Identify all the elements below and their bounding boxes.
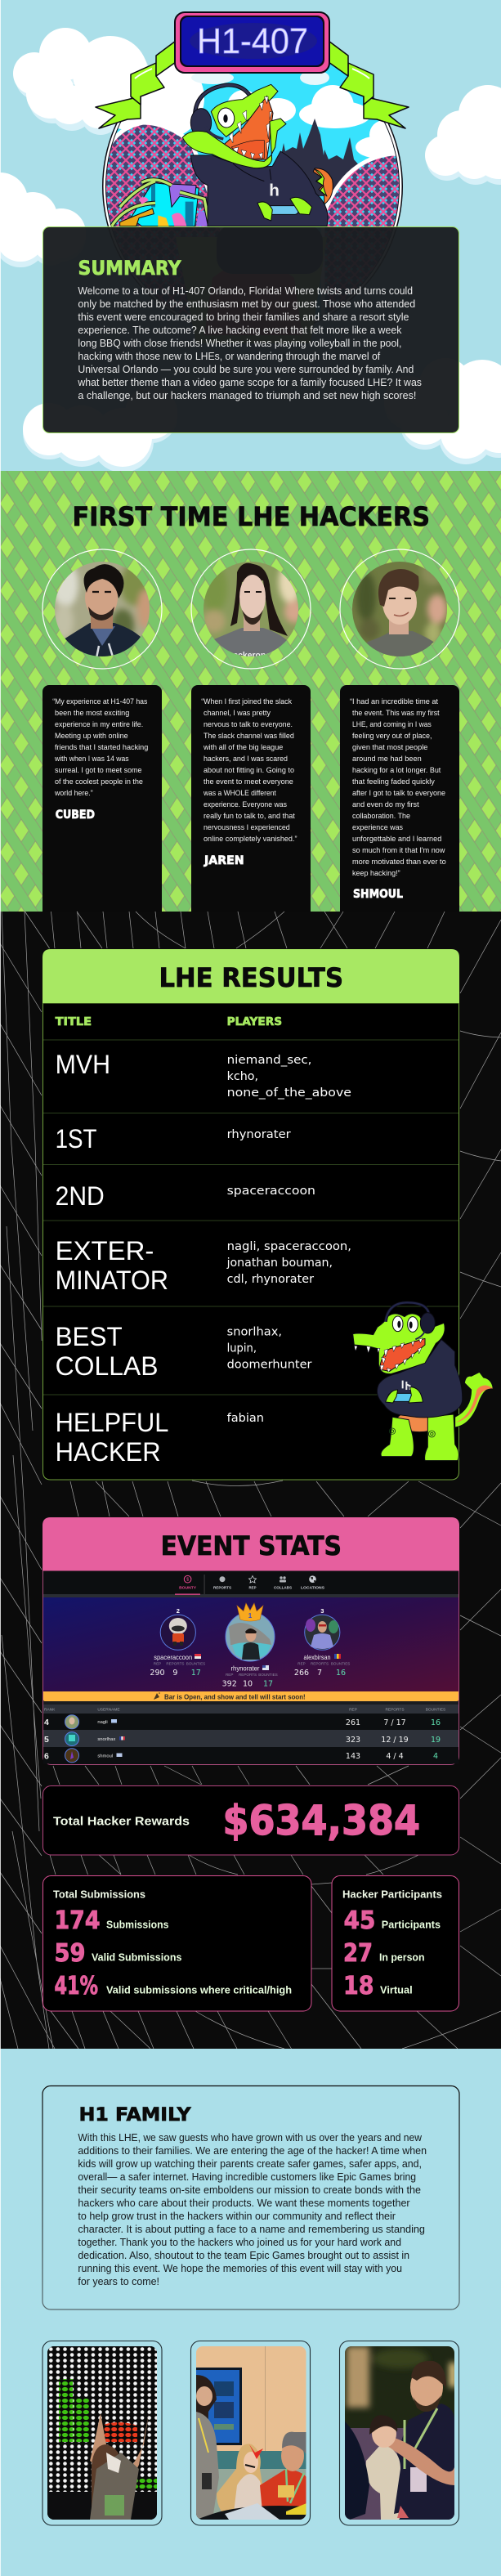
value: rewards amount: $634,384 (222, 1797, 420, 1844)
tab: reports: REPORTS (213, 1586, 232, 1591)
table row: shmoul: 4 / 4 (386, 1752, 404, 1761)
ride carriage (112, 180, 218, 226)
quote card: jaren: The slack channel was filled (204, 731, 294, 740)
quote card: jaren: hackers, and I was scared (204, 754, 288, 763)
section: family background (0, 2049, 501, 2576)
table header: REPORTS (385, 1707, 405, 1712)
podium: first place: 10 (243, 1679, 253, 1689)
text block: family body: to help grow trust in the hackers within our community and reflect their (78, 2211, 396, 2222)
announcement banner (43, 1691, 459, 1701)
headset (190, 85, 251, 137)
stat: submissions: Submissions (106, 1920, 168, 1931)
quote card: cubed: Meeting up with online (55, 731, 128, 740)
stat: virtual (343, 1972, 413, 2000)
text block: family body: for years to come! (78, 2276, 159, 2287)
stat: participants: 45 (344, 1906, 375, 1935)
text block: family body: overall— a safer internet. Having incredible customers like Epic Games bring (78, 2171, 416, 2183)
photo frame: father holding child (340, 2341, 459, 2525)
row: exterminator: nagli, spaceraccoon, (227, 1240, 351, 1253)
heading: summary: SUMMARY (78, 257, 181, 280)
quote card: shmoul: the event. This was my first (352, 708, 440, 717)
medallion ring (102, 36, 403, 337)
podium: first place: rhynorater (230, 1664, 260, 1673)
heading: LHE results: LHE RESULTS (159, 962, 343, 993)
title badge: H1-407 (175, 12, 329, 73)
column header: title: TITLE (56, 1015, 92, 1028)
ribbon: right (329, 41, 409, 128)
row: exterminator: MINATOR (56, 1266, 168, 1295)
cloud: top left (13, 28, 164, 135)
stat: in person: In person (379, 1952, 425, 1964)
quote card: shmoul: collaboration. The (352, 811, 410, 820)
quote card: jaren: nervousness I experienced (204, 822, 290, 831)
table header (43, 1701, 459, 1714)
table row: shmoul: shmoul (97, 1754, 113, 1759)
panel: summary (42, 227, 459, 433)
column header: players: PLAYERS (227, 1015, 282, 1028)
podium: third place: 16 (336, 1669, 346, 1678)
quote card: cubed: with when I was 14 was (54, 754, 129, 763)
stat: participants (344, 1906, 441, 1935)
tab: locations: LOCATIONS (301, 1586, 325, 1591)
row: MVH: none_of_the_above (227, 1086, 351, 1100)
stat: valid submissions (54, 1939, 181, 1968)
podium: first place (222, 1603, 278, 1689)
quote card: shmoul: LHE, and coming in I was (352, 719, 432, 728)
quote card: shmoul: hacking for a lot longer. But (352, 765, 441, 774)
table row: snorlhax: 5 (44, 1735, 49, 1745)
table row: shmoul: 143 (346, 1752, 360, 1761)
tab: locations (301, 1575, 325, 1591)
table row: snorlhax: 12 / 19 (381, 1736, 409, 1745)
podium panel (43, 1597, 459, 1691)
row: 1ST: rhynorater (227, 1128, 291, 1141)
row: best collab: doomerhunter (227, 1359, 312, 1372)
hoodie logo: h (269, 181, 280, 199)
stat: in person (343, 1939, 425, 1968)
table row: snorlhax: 19 (431, 1736, 441, 1745)
eyes (392, 1316, 418, 1332)
text block: summary body: this event were encouraged to bring their families and share a resort style (78, 311, 409, 323)
podium: third place: alexbirsan (304, 1654, 331, 1661)
stat: in person: 27 (343, 1939, 373, 1968)
section: sky header background (0, 0, 501, 471)
text block: summary body: experience. The outcome? A live hacking event that felt more like a week (78, 325, 402, 336)
label: total hacker rewards: Total Hacker Rewards (53, 1815, 190, 1828)
headset (386, 1302, 435, 1339)
quote card: shmoul: given that most people (352, 742, 427, 751)
tail (313, 168, 333, 204)
quote card: jaren: experience. Everyone was (204, 800, 287, 809)
quote card: jaren: “When I first joined the slack (201, 697, 292, 706)
podium: third place: 266 (294, 1669, 309, 1678)
right lattice dome (325, 152, 399, 226)
table row: shmoul (43, 1747, 459, 1764)
quote card: cubed: of the coolest people in the (55, 777, 143, 786)
stat: participants: Participants (382, 1920, 441, 1931)
quote card: shmoul: unforgettable and I learned (352, 834, 441, 843)
table row: nagli: nagli (97, 1720, 108, 1725)
row: 1ST (56, 1124, 291, 1154)
text block: family body: With this LHE, we saw guests who have grown with us over the years and new (78, 2132, 423, 2144)
row: best collab: lupin, (227, 1342, 257, 1355)
quote card: shmoul: that feeling faded quickly (352, 777, 435, 786)
text block: family body: character. It is about putting a face to a name and remembering us standing (78, 2224, 425, 2235)
legs (381, 1414, 459, 1461)
alligator with hoodie and controller (182, 84, 333, 226)
quote card: jaren: really fun to talk to, and that (204, 811, 295, 820)
cloud: right (425, 85, 501, 185)
row: MVH: niemand_sec, (227, 1054, 312, 1067)
portrait: jaren: hackerone (228, 651, 271, 661)
heading: event stats: EVENT STATS (161, 1530, 342, 1561)
table row: shmoul: 6 (44, 1751, 49, 1761)
podium: third place: REPORTS (311, 1661, 329, 1666)
tab: collabs: COLLABS (274, 1586, 293, 1591)
results header (42, 949, 459, 1003)
hoodie (377, 1339, 463, 1418)
heading: total submissions: Total Submissions (53, 1888, 145, 1900)
podium: second place: 9 (172, 1669, 177, 1678)
quote card: cubed: experience in my entire life. (55, 719, 143, 728)
text block: family body: running this event. We hope the memories of this event will stay with you (78, 2263, 402, 2274)
text block: summary body: only be matched by the enthusiasm met by our guest. Those who attended (78, 298, 415, 310)
row: MVH (56, 1050, 351, 1100)
row: helpful hacker: HELPFUL (56, 1408, 168, 1437)
podium: third place: 3 (320, 1607, 324, 1615)
table row: nagli: 261 (346, 1718, 360, 1727)
table header: RANK (44, 1707, 56, 1712)
text block: family body: dedication. Also, shoutout to the team Epic Games brought out to assist in (78, 2250, 409, 2261)
text block: summary body: long BBQ with close friends! Whether it was playing volleyball in the pool, (78, 338, 401, 349)
podium: second place: spaceraccoon (154, 1654, 193, 1661)
row: 2ND: spaceraccoon (227, 1185, 315, 1198)
row: helpful hacker: HACKER (56, 1437, 161, 1467)
quote card: shmoul: around me had been (352, 754, 422, 763)
row: exterminator (56, 1236, 351, 1295)
stat: critical or high (54, 1972, 292, 2000)
quote card: jaren: with all of the big league (203, 742, 283, 751)
table row: snorlhax (43, 1730, 459, 1747)
row: 2ND: 2ND (56, 1181, 105, 1211)
heading: first time LHE hackers: FIRST TIME LHE HACKERS (72, 501, 430, 532)
text block: family body: their security teams on-site emboldens our mission to create bonds with the (78, 2184, 421, 2196)
tab: collabs (274, 1576, 293, 1591)
stat: submissions: 174 (54, 1906, 100, 1935)
stat: submissions (54, 1906, 168, 1935)
leaderboard tabs (43, 1575, 459, 1597)
mouth (379, 1338, 425, 1371)
quote card: shmoul: “I had an incredible time at (350, 697, 438, 706)
crown: 1 (248, 1612, 253, 1620)
panel: total hacker rewards (42, 1785, 459, 1855)
row: MVH: MVH (56, 1050, 110, 1079)
stat: critical or high: Valid submissions where critical/high (106, 1985, 292, 1996)
podium: second place: 17 (191, 1669, 201, 1678)
quote card: shmoul: after I got to talk to everyone (352, 788, 445, 797)
podium: third place: 7 (317, 1669, 322, 1678)
eye (217, 106, 236, 129)
text block: family body: hackers who care about their products. We want these moments together (78, 2197, 410, 2209)
mouth interior (223, 96, 273, 160)
table row: snorlhax: 323 (346, 1736, 360, 1745)
text block: summary body: Universal Orlando — you could be sure you were surrounded by family. And (78, 364, 414, 375)
quote card: jaren: the event to meet everyone (204, 777, 293, 786)
podium: second place: REP (154, 1661, 161, 1666)
stat: critical or high: 41% (54, 1972, 98, 2000)
stat: virtual: 18 (343, 1972, 374, 2000)
name: jaren: JAREN (204, 854, 244, 867)
text block: family body (78, 2132, 427, 2287)
quote card: cubed: friends that I started hacking (55, 742, 148, 751)
row: best collab: BEST (56, 1322, 123, 1351)
text block: summary body: hacking with those new to LHEs, or wandering through the marvel of (78, 351, 381, 362)
text block: family body: together. Thank you to the hackers who joined us for your hard work and (78, 2237, 401, 2248)
podium: third place: REP (297, 1661, 306, 1666)
quote card: jaren: nervous to talk to everyone. (204, 719, 293, 728)
stat: valid submissions: Valid Submissions (92, 1952, 181, 1964)
quote card: cubed: world here.” (54, 788, 93, 797)
table row: nagli: 16 (431, 1718, 441, 1727)
head (353, 1314, 445, 1374)
podium: third place: BOUNTIES (331, 1661, 350, 1666)
quote card: shmoul: feeling very out of place, (352, 731, 432, 740)
row: 1ST: 1ST (56, 1124, 96, 1154)
table header: USERNAME (97, 1707, 120, 1712)
section: black background with wireframe (0, 912, 501, 2049)
tab: rep (248, 1576, 257, 1591)
text block: summary body: what better theme than a video game scope for a family focused LHE? It was (77, 377, 422, 388)
row: best collab: snorlhax, (227, 1326, 282, 1339)
panel: hacker participants (332, 1875, 459, 2011)
tab: bounty: $ (186, 1578, 189, 1583)
tail (455, 1372, 493, 1427)
text block: summary body: a challenge, but our hackers managed to triumph and set new high scores! (78, 390, 416, 401)
announcement banner: Bar is Open, and show and tell will start soon! (164, 1694, 306, 1700)
head upper (211, 84, 278, 137)
podium: third place (294, 1607, 350, 1678)
teeth (354, 1338, 423, 1372)
row: best collab: COLLAB (56, 1351, 159, 1381)
illustration: medallion with alligator (90, 12, 409, 343)
quote card: shmoul: so much from it that I'm now (352, 845, 445, 854)
podium: second place: REPORTS (166, 1661, 184, 1666)
row: best collab (56, 1322, 312, 1381)
teeth (229, 96, 272, 159)
text block: summary body (77, 285, 422, 401)
left edge strip (0, 0, 1, 2576)
podium: first place: 17 (263, 1679, 273, 1689)
tab: rep: REP (248, 1586, 257, 1591)
quote card: shmoul (340, 685, 459, 922)
table row: snorlhax: snorlhax (97, 1737, 115, 1742)
row: helpful hacker: fabian (227, 1412, 264, 1425)
left lattice dome (106, 124, 208, 226)
event stats header (42, 1517, 459, 1571)
belly (396, 1410, 443, 1432)
quote card: cubed: been the most exciting (55, 708, 129, 717)
podium: first place: 392 (222, 1679, 237, 1689)
panel: total submissions (42, 1875, 311, 2011)
row: helpful hacker (56, 1408, 264, 1467)
quote card: shmoul: more motivated than ever to (352, 857, 446, 866)
quote card: shmoul: and even do my first (352, 800, 419, 809)
podium: first place: REP (226, 1673, 233, 1677)
photo frame: child at light wall (42, 2341, 162, 2525)
row: 2ND (56, 1181, 315, 1211)
lower alligator seat seen faintly behind the summary card (176, 225, 327, 343)
name: shmoul: SHMOUL (353, 888, 403, 901)
quote card: cubed (42, 685, 162, 922)
table row: shmoul: 4 (433, 1752, 438, 1761)
quote card: jaren: about not fitting in. Going to (204, 765, 294, 774)
controller and hands (386, 1387, 423, 1403)
tab: bounty: BOUNTY (179, 1586, 197, 1591)
heading: hacker participants: Hacker Participants (342, 1888, 442, 1900)
table row: nagli: 7 / 17 (383, 1718, 406, 1727)
row: MVH: kcho, (227, 1070, 258, 1083)
heading: H1 family: H1 FAMILY (79, 2105, 192, 2126)
podium: first place: REPORTS (239, 1673, 257, 1677)
controller and hands (257, 197, 312, 221)
section: green lattice background (0, 471, 501, 912)
podium: second place: 290 (150, 1669, 165, 1678)
hoodie (190, 151, 328, 226)
quote card: jaren: channel, I was pretty (204, 708, 271, 717)
portrait: jaren (191, 549, 311, 669)
cloud: left middle (0, 172, 86, 267)
knee swirls (389, 1428, 435, 1437)
quote card: shmoul: experience was (352, 822, 403, 831)
podium: second place: 2 (177, 1607, 180, 1615)
name: cubed: CUBED (56, 809, 95, 822)
text block: family body: kids will grow up watching their parents create safer games, safer apps, and, (78, 2158, 422, 2170)
title badge: H1-407: H1-407 (197, 21, 308, 61)
tab: reports (213, 1576, 232, 1591)
quote card: jaren: online completely vanished.” (204, 834, 297, 843)
quote card: shmoul: keep hacking!” (352, 868, 400, 877)
table row: nagli: 4 (44, 1718, 49, 1727)
ribbon: left (96, 41, 176, 128)
castle silhouette (282, 119, 364, 196)
lower jaw (182, 119, 286, 168)
photo frame: family at table (191, 2341, 311, 2525)
cloud: bottom right (384, 358, 501, 464)
quote card: jaren: was a WHOLE different (203, 788, 276, 797)
quote card: jaren (191, 685, 311, 922)
podium: first place: BOUNTIES (258, 1673, 278, 1677)
text block: summary body: Welcome to a tour of H1-407 Orlando, Florida! Where twists and turns could (78, 285, 413, 297)
table header: BOUNTIES (426, 1707, 445, 1712)
cloud: bottom left (23, 387, 177, 473)
table header: REP (349, 1707, 357, 1712)
portrait: shmoul (340, 549, 459, 669)
medallion scene: sky, clouds, castle and lattice domes (106, 64, 399, 318)
table row: nagli (43, 1714, 459, 1730)
podium: second place: BOUNTIES (186, 1661, 205, 1666)
panel: event stats (42, 1517, 459, 1764)
stat: valid submissions: 59 (54, 1939, 85, 1968)
panel: LHE results (42, 949, 459, 1480)
microphone arm (206, 127, 223, 139)
mascot: standing alligator (353, 1302, 493, 1461)
portrait: cubed (42, 549, 162, 669)
hoodie logo (403, 1381, 410, 1390)
row: exterminator: jonathan bouman, (226, 1257, 333, 1270)
podium: second place (150, 1607, 205, 1678)
row: exterminator: EXTER- (56, 1236, 154, 1266)
text block: family body: additions to their families. We are entering the age of the hacker! A time when (78, 2145, 427, 2157)
quote card: cubed: “My experience at H1-407 has (52, 697, 148, 706)
stat: virtual: Virtual (380, 1985, 413, 1996)
panel: H1 family (42, 2086, 459, 2309)
quote card: cubed: surreal. I got to meet some (55, 765, 142, 774)
tab: bounty (175, 1575, 200, 1595)
row: exterminator: cdl, rhynorater (227, 1273, 314, 1286)
